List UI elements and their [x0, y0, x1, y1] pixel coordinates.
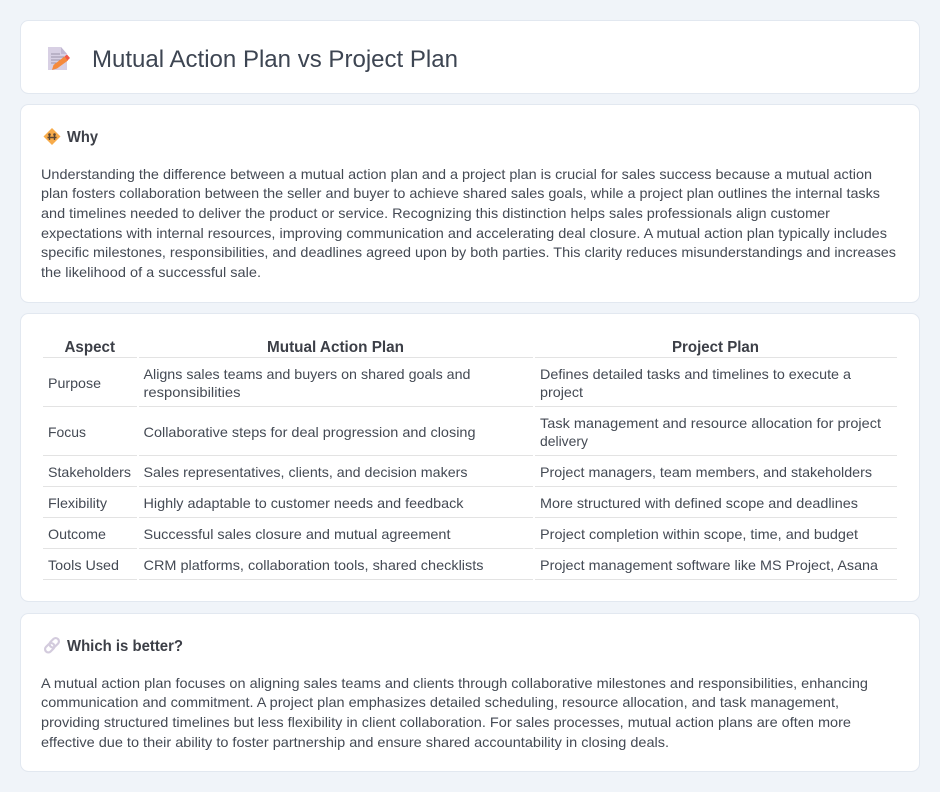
text block: which is better paragraph: providing structured timelines but less flexibility in client collaboration. For sales processes, mutual action plans are often more	[41, 714, 851, 730]
table row: flexibility: Flexibility	[48, 495, 107, 511]
table row: focus: Collaborative steps for deal progression and closing	[144, 424, 476, 440]
text block: which is better paragraph: A mutual action plan focuses on aligning sales teams and clients through collaborative milestones and responsibilities, enhancing	[41, 675, 868, 691]
table row: stakeholders	[48, 464, 872, 480]
heading: why: Why	[67, 129, 98, 146]
panel: why	[20, 104, 920, 302]
title: Mutual Action Plan vs Project Plan	[92, 46, 458, 73]
text block: why paragraph: Understanding the difference between a mutual action plan and a project plan is crucial for sales success because a mutual action	[41, 166, 872, 182]
table row: outcome: Outcome	[48, 526, 106, 542]
table row: flexibility	[48, 495, 858, 511]
table row: focus	[48, 415, 881, 449]
table row: tools used	[48, 557, 878, 573]
panel: title header	[20, 20, 920, 94]
text block: why paragraph: the likelihood of a successful sale.	[41, 264, 261, 280]
panel: comparison table	[20, 314, 920, 602]
text block: which is better paragraph	[41, 675, 868, 750]
table row: stakeholders: Project managers, team members, and stakeholders	[540, 464, 872, 480]
table row: purpose: Defines detailed tasks and timelines to execute a	[540, 366, 851, 382]
table row: purpose: responsibilities	[144, 384, 240, 400]
icon: document with pencil	[48, 47, 70, 70]
table row: tools used: Tools Used	[48, 557, 119, 573]
table row: purpose: Aligns sales teams and buyers on shared goals and	[144, 366, 470, 382]
table header	[64, 339, 759, 356]
table row: tools used: Project management software like MS Project, Asana	[540, 557, 878, 573]
text block: why paragraph: plan fosters collaboration between the seller and buyer to achieve shared sales goals, while a project plan outlines the internal tasks	[41, 185, 880, 201]
text block: why paragraph	[41, 166, 896, 280]
text block: why paragraph: specific milestones, responsibilities, and deadlines agreed upon by both parties. This clarity reduces misunderstandings and increases	[41, 244, 896, 260]
table row: outcome	[48, 526, 858, 542]
table header: Aspect	[64, 339, 116, 356]
table row: focus: delivery	[540, 433, 588, 449]
table header: Mutual Action Plan	[267, 339, 404, 356]
table row: purpose	[48, 366, 851, 400]
table row: outcome: Project completion within scope, time, and budget	[540, 526, 858, 542]
table row: purpose: project	[540, 384, 583, 400]
table row: focus: Task management and resource allocation for project	[540, 415, 881, 431]
text block: which is better paragraph: communication and commitment. A project plan emphasizes detailed scheduling, resource allocation, and task management,	[41, 694, 839, 710]
table row: focus: Focus	[48, 424, 86, 440]
panel: which is better	[20, 614, 920, 772]
icon: warning diamond	[44, 128, 60, 145]
table row: stakeholders: Stakeholders	[48, 464, 131, 480]
table row: purpose: Purpose	[48, 375, 101, 391]
text block: which is better paragraph: effective due to their ability to foster partnership and ensure shared accountability in closing deals.	[41, 734, 669, 750]
icon: chain link	[44, 637, 60, 654]
table row: stakeholders: Sales representatives, clients, and decision makers	[144, 464, 468, 480]
table header: Project Plan	[672, 339, 759, 356]
table grid lines	[43, 357, 897, 580]
heading: which is better: Which is better?	[67, 638, 183, 655]
table row: flexibility: Highly adaptable to customer needs and feedback	[144, 495, 465, 511]
table row: outcome: Successful sales closure and mutual agreement	[144, 526, 451, 542]
text block: why paragraph: and timelines needed to deliver the product or service. Recognizing this distinction helps sales professionals align customer	[41, 205, 830, 221]
table row: tools used: CRM platforms, collaboration tools, shared checklists	[144, 557, 484, 573]
table row: flexibility: More structured with defined scope and deadlines	[540, 495, 858, 511]
text block: why paragraph: expectations with internal resources, improving communication and accelerating deal closure. A mutual action plan typically includes	[41, 225, 887, 241]
